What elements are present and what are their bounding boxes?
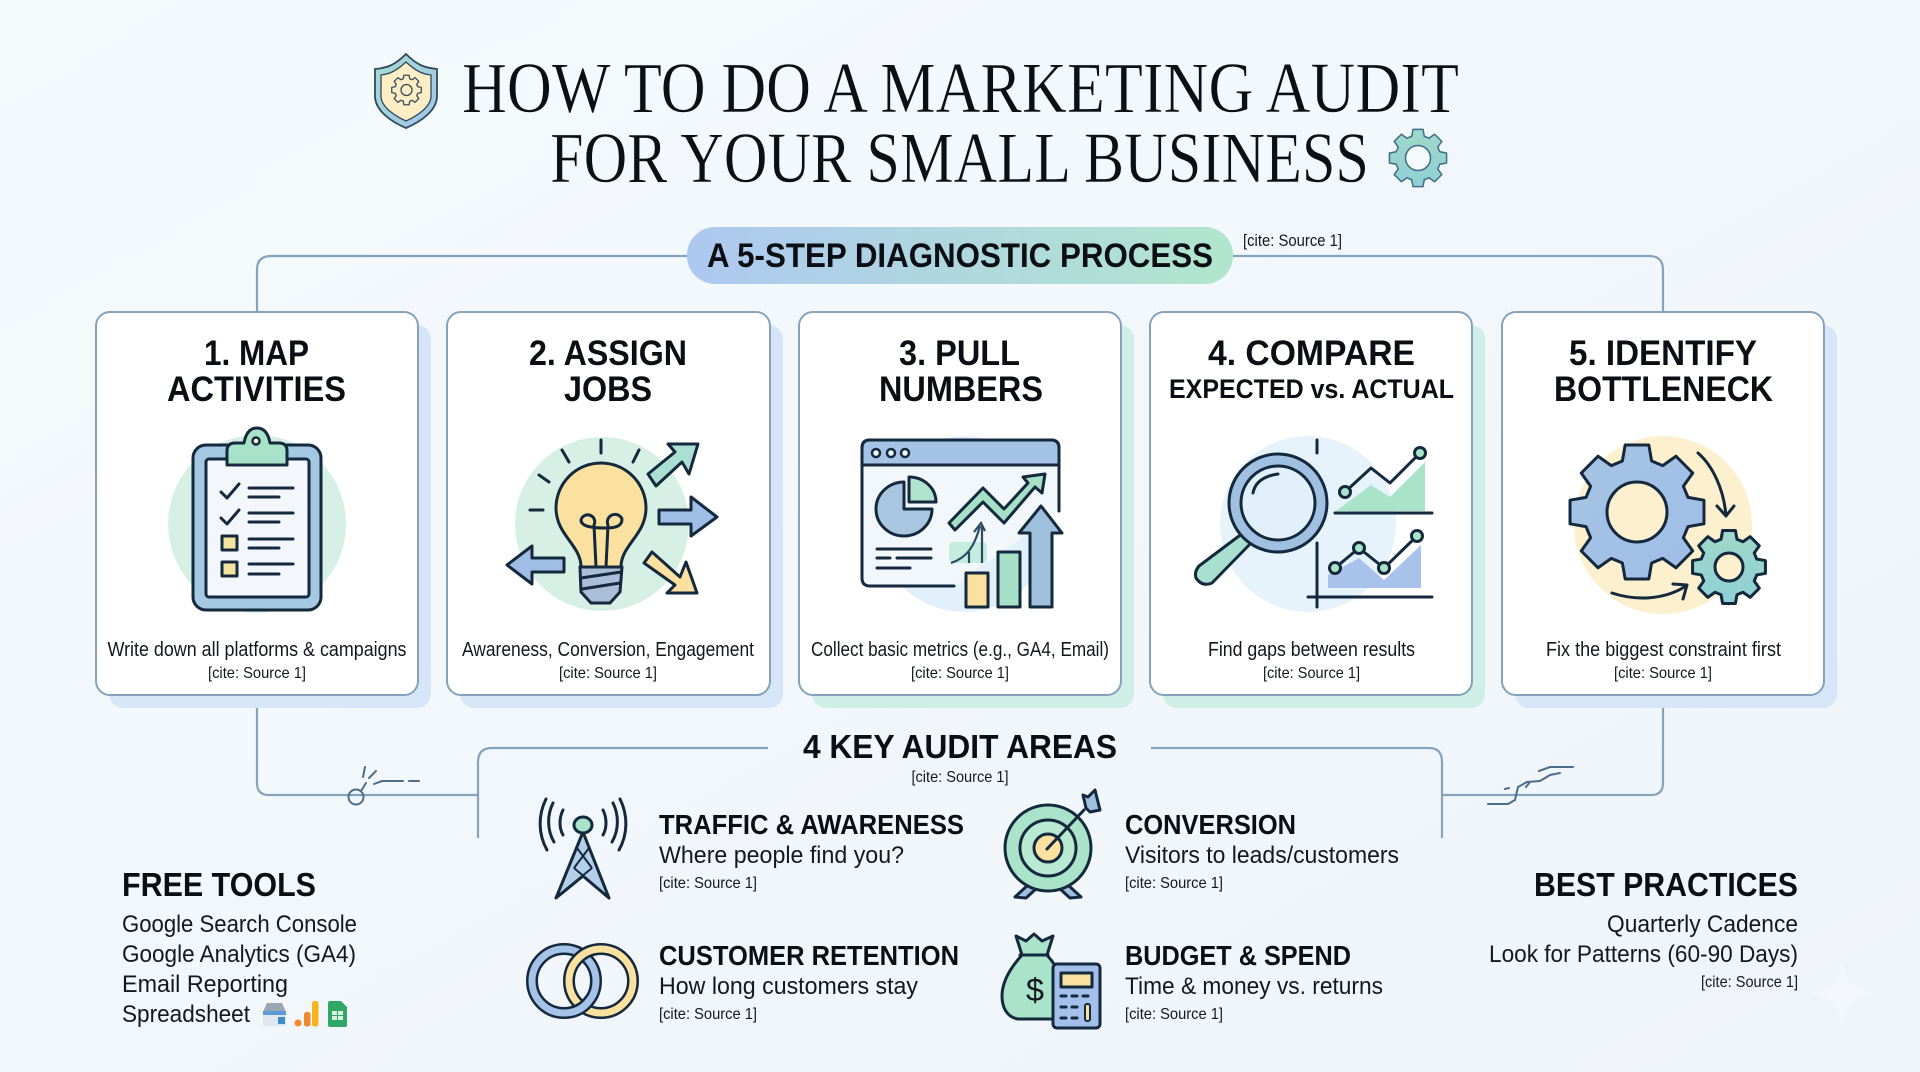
icon: sparkle bbox=[1809, 960, 1875, 1027]
heading: step 4: 4. COMPARE bbox=[1208, 334, 1415, 373]
text: conversion bbox=[1125, 809, 1399, 892]
sketch mark: left connector bbox=[348, 767, 419, 804]
description: step 5 bbox=[1546, 639, 1781, 682]
section: free tools bbox=[122, 866, 357, 1028]
text: conversion: CONVERSION bbox=[1125, 809, 1296, 840]
text: budget bbox=[1125, 940, 1383, 1023]
icon: analytics dashboard bbox=[862, 436, 1062, 612]
description: step 2: [cite: Source 1] bbox=[559, 665, 657, 682]
heading: step 4: EXPECTED vs. ACTUAL bbox=[1169, 374, 1454, 404]
icon: teal gear bbox=[1389, 129, 1447, 187]
title: FOR YOUR SMALL BUSINESS bbox=[550, 118, 1369, 198]
connector: lower bracket right bbox=[1151, 695, 1663, 838]
description: step 1: Write down all platforms & campaigns bbox=[108, 639, 406, 661]
icon: money bag and calculator: $ bbox=[1026, 972, 1044, 1008]
text: conversion: [cite: Source 1] bbox=[1125, 875, 1223, 892]
heading: step 2 bbox=[529, 334, 687, 409]
description: step 4 bbox=[1208, 639, 1415, 682]
sketch mark: right connector bbox=[1488, 767, 1573, 804]
connector: lower bracket left bbox=[257, 695, 768, 838]
icon: shield with gear bbox=[375, 54, 437, 128]
list: free tools: Google Search Console bbox=[122, 911, 357, 938]
description: step 3 bbox=[811, 639, 1109, 682]
heading: step 5: 5. IDENTIFY bbox=[1569, 334, 1757, 373]
icon: sheets bbox=[328, 1001, 347, 1027]
icon: gears bbox=[1570, 436, 1765, 614]
list: best practices: [cite: Source 1] bbox=[1701, 974, 1798, 991]
panel: step 2 assign jobs bbox=[447, 312, 783, 708]
heading: step 3 bbox=[879, 334, 1043, 409]
audit area: conversion bbox=[1005, 790, 1399, 898]
heading: step 3: 3. PULL bbox=[899, 334, 1020, 373]
text: retention: [cite: Source 1] bbox=[659, 1006, 757, 1023]
connector: top bracket bbox=[257, 256, 1663, 312]
icon: magnifier with charts bbox=[1195, 436, 1432, 612]
heading: step 4 bbox=[1169, 334, 1454, 404]
description: step 3: [cite: Source 1] bbox=[911, 665, 1009, 682]
audit area: budget and spend bbox=[1002, 934, 1383, 1028]
title bbox=[462, 48, 1459, 198]
list: best practices: Look for Patterns (60-90 Days) bbox=[1489, 941, 1798, 968]
text: retention bbox=[659, 940, 959, 1023]
text: budget: [cite: Source 1] bbox=[1125, 1006, 1223, 1023]
icon: clipboard bbox=[168, 428, 346, 613]
description: step 5: Fix the biggest constraint first bbox=[1546, 639, 1781, 661]
panel: step 1 map activities bbox=[96, 312, 431, 708]
text: traffic: [cite: Source 1] bbox=[659, 875, 757, 892]
list: free tools: Email Reporting bbox=[122, 971, 288, 998]
description: step 5: [cite: Source 1] bbox=[1614, 665, 1712, 682]
panel: step 4 compare bbox=[1150, 312, 1485, 708]
description: step 1 bbox=[108, 639, 406, 682]
description: step 2 bbox=[462, 639, 754, 682]
description: step 2: Awareness, Conversion, Engagement bbox=[462, 639, 754, 661]
heading: step 2: 2. ASSIGN bbox=[529, 334, 687, 373]
audit area: traffic and awareness bbox=[540, 799, 964, 898]
text: retention: CUSTOMER RETENTION bbox=[659, 940, 959, 971]
heading: free tools: FREE TOOLS bbox=[122, 866, 316, 903]
icon: light bulb with arrows bbox=[507, 437, 717, 611]
heading: 4 key audit areas: [cite: Source 1] bbox=[912, 769, 1008, 786]
audit area: customer retention bbox=[532, 940, 959, 1023]
heading: step 2: JOBS bbox=[564, 370, 652, 409]
heading: 4 key audit areas bbox=[803, 728, 1117, 786]
list: free tools: Google Analytics (GA4) bbox=[122, 941, 356, 968]
banner: 5-step process bbox=[687, 227, 1233, 284]
description: step 4: [cite: Source 1] bbox=[1263, 665, 1360, 682]
banner: 5-step process: A 5-STEP DIAGNOSTIC PROCESS bbox=[707, 237, 1213, 275]
icon: linked rings bbox=[532, 949, 633, 1013]
description: step 1: [cite: Source 1] bbox=[208, 665, 306, 682]
title: HOW TO DO A MARKETING AUDIT bbox=[462, 48, 1459, 128]
panel: step 3 pull numbers bbox=[799, 312, 1134, 708]
list: best practices bbox=[1489, 911, 1798, 991]
heading: step 1 bbox=[167, 334, 346, 409]
heading: step 1: 1. MAP bbox=[204, 334, 309, 373]
heading: best practices: BEST PRACTICES bbox=[1534, 866, 1798, 903]
text: traffic: Where people find you? bbox=[659, 842, 904, 869]
icon: analytics bbox=[294, 1001, 318, 1026]
list: free tools bbox=[122, 911, 357, 1028]
panel: step 5 identify bottleneck bbox=[1502, 312, 1837, 708]
text: conversion: Visitors to leads/customers bbox=[1125, 842, 1399, 869]
text: retention: How long customers stay bbox=[659, 973, 918, 1000]
icon: money bag and calculator bbox=[1002, 934, 1100, 1028]
heading: step 5: BOTTLENECK bbox=[1554, 370, 1773, 409]
icon: signal tower bbox=[540, 799, 626, 898]
heading: 4 key audit areas: 4 KEY AUDIT AREAS bbox=[803, 728, 1117, 765]
icon: target with dart bbox=[1005, 790, 1100, 898]
heading: step 1: ACTIVITIES bbox=[167, 370, 346, 409]
description: step 3: Collect basic metrics (e.g., GA4, Email) bbox=[811, 639, 1109, 661]
heading: step 5 bbox=[1554, 334, 1773, 409]
description: step 4: Find gaps between results bbox=[1208, 639, 1415, 661]
citation: banner: [cite: Source 1] bbox=[1243, 231, 1342, 250]
text: budget: BUDGET & SPEND bbox=[1125, 940, 1351, 971]
list: best practices: Quarterly Cadence bbox=[1607, 911, 1798, 938]
section: best practices bbox=[1489, 866, 1798, 991]
heading: step 3: NUMBERS bbox=[879, 370, 1043, 409]
text: traffic bbox=[659, 809, 964, 892]
list: free tools: Spreadsheet bbox=[122, 1001, 250, 1028]
text: budget: Time & money vs. returns bbox=[1125, 973, 1383, 1000]
text: traffic: TRAFFIC & AWARENESS bbox=[659, 809, 964, 840]
icon: search console bbox=[263, 1003, 286, 1026]
